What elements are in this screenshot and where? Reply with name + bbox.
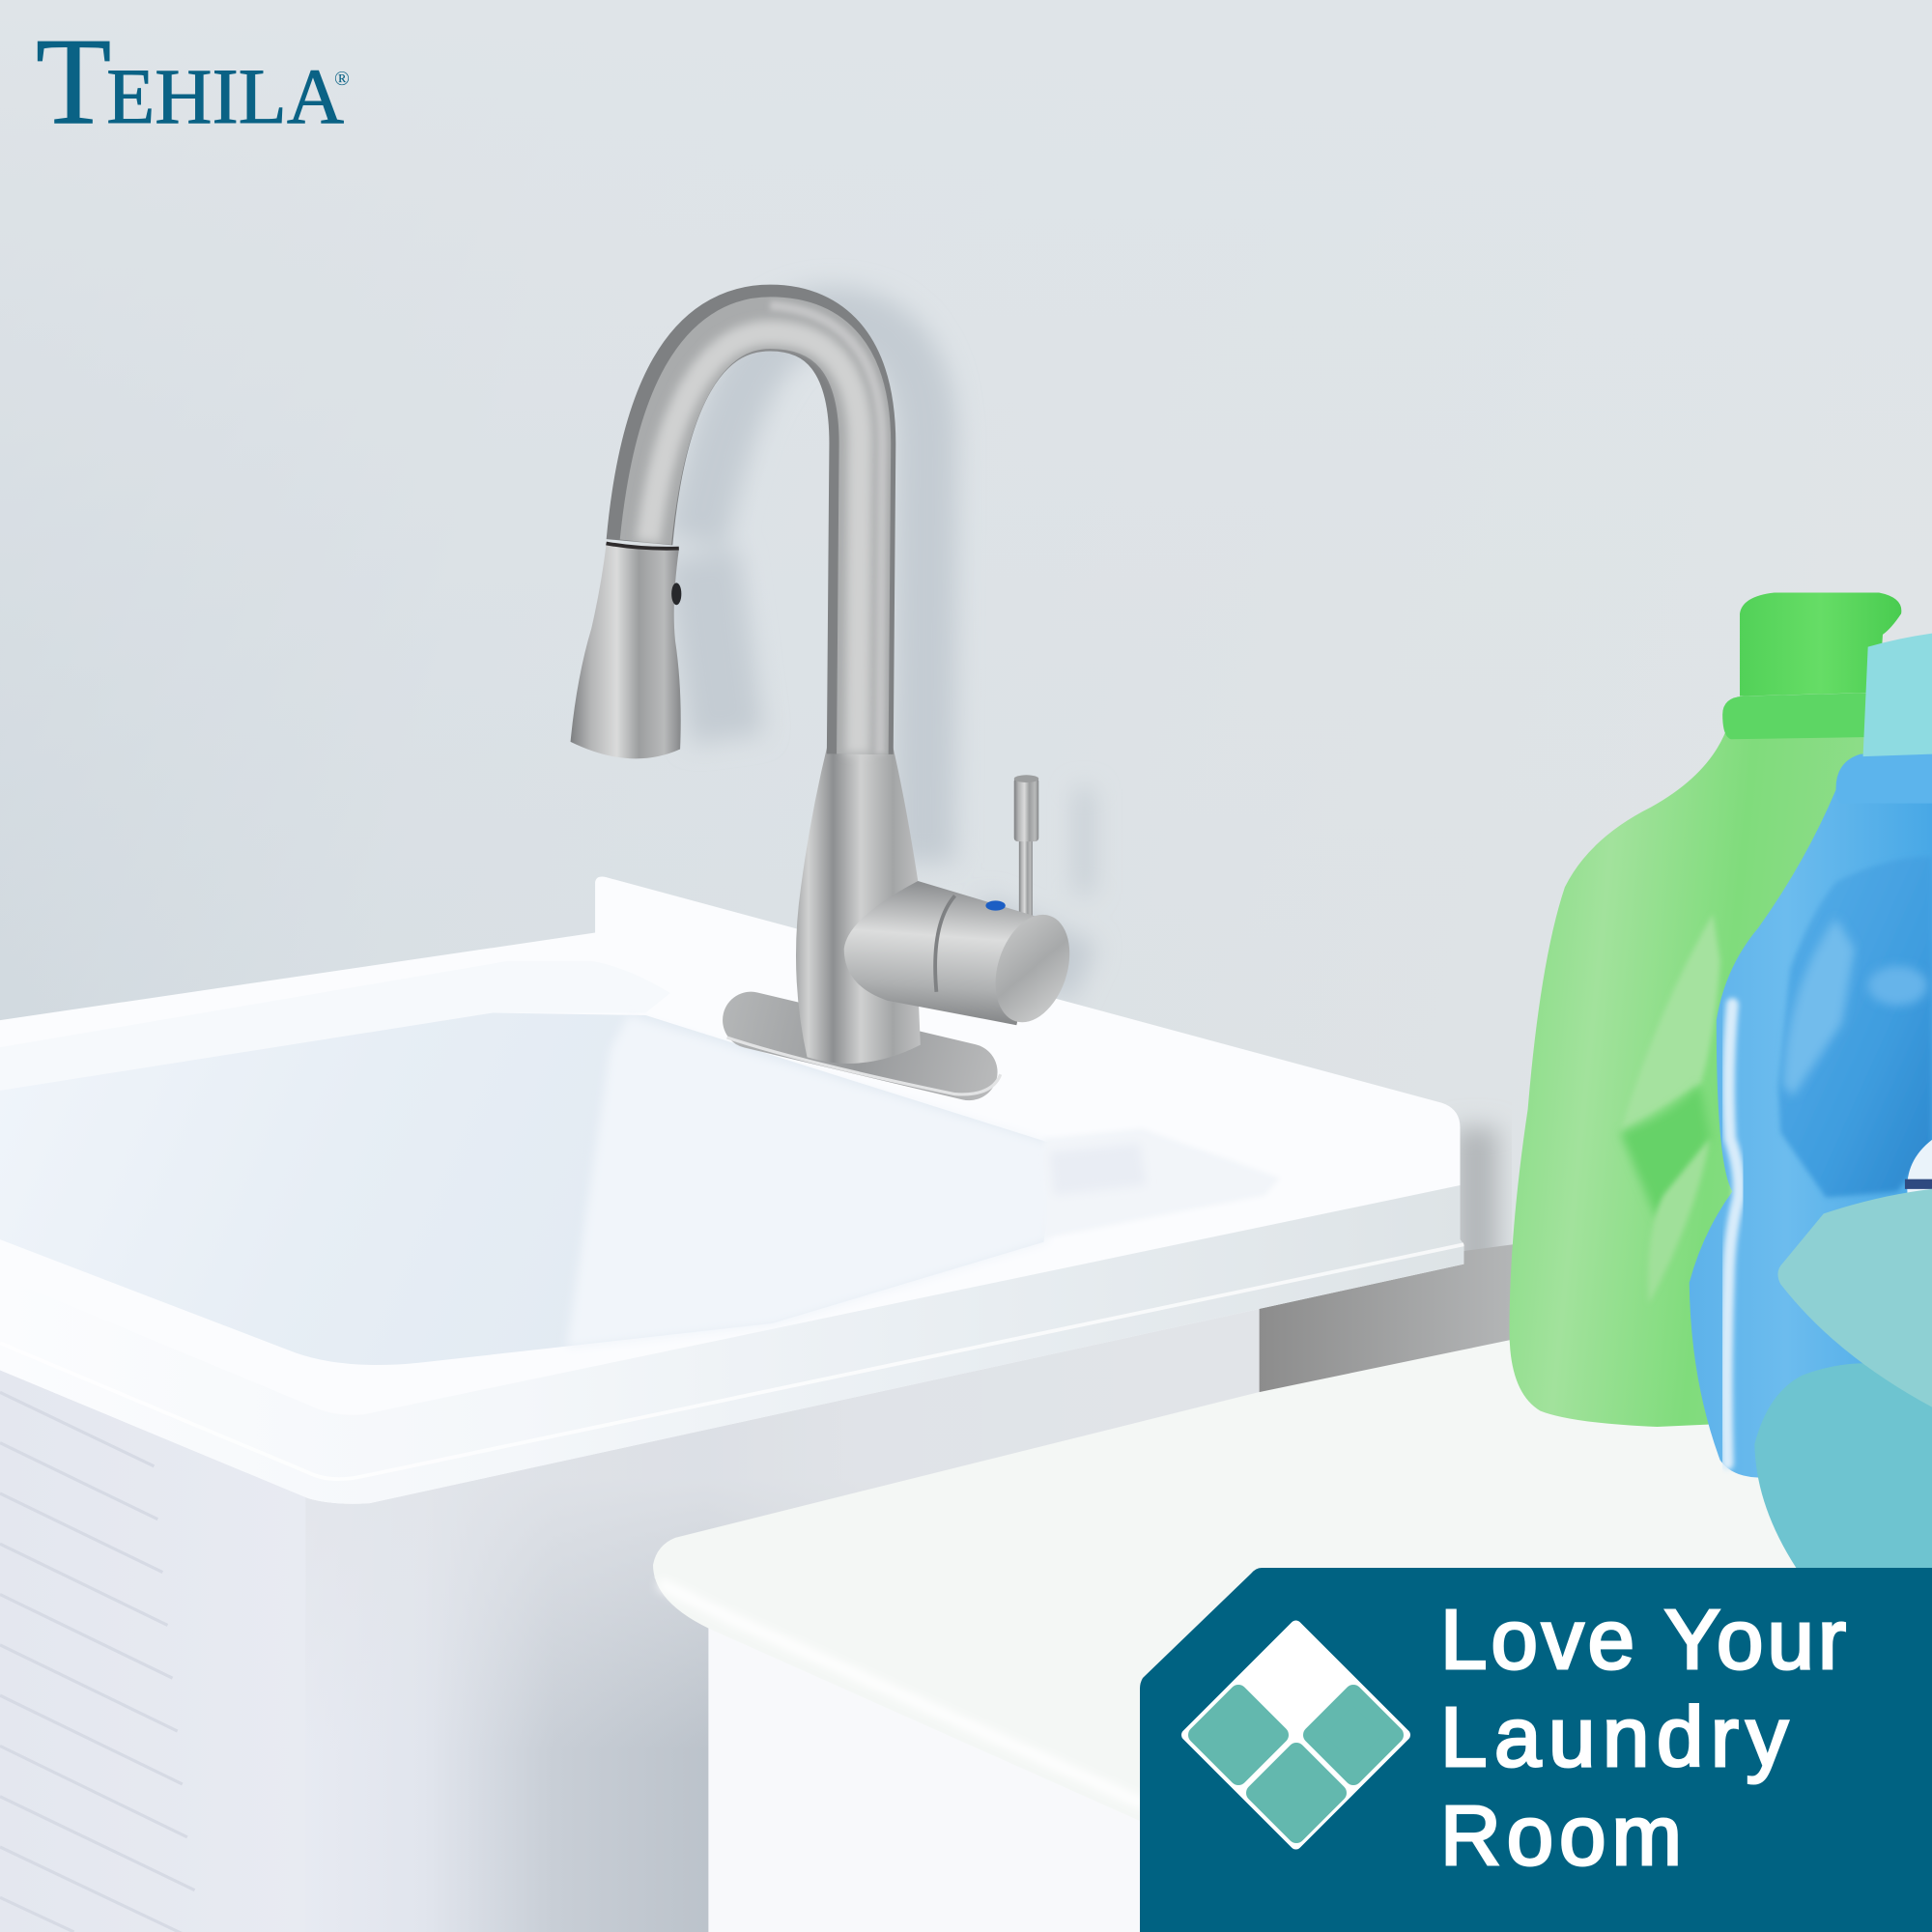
blue bottle label — [1907, 1140, 1932, 1193]
basin right wall — [567, 1015, 1060, 1348]
blue bottle handle glow right — [1868, 966, 1927, 1006]
blue bottle collar — [1836, 752, 1932, 804]
label navy strip — [1905, 1179, 1932, 1189]
cabinet top lightening — [469, 1309, 1260, 1683]
white diamond outline — [1187, 1627, 1405, 1843]
cabinet side with louvers — [0, 1355, 310, 1932]
wall shadow beside sink — [1460, 1117, 1509, 1251]
sink tub — [0, 877, 1463, 1504]
lower towel — [1754, 1363, 1932, 1589]
blue bottle body — [1690, 790, 1932, 1491]
counter nose highlight — [659, 1583, 1146, 1805]
upper towel — [1777, 1189, 1932, 1407]
green detergent bottle — [1509, 593, 1901, 1427]
green bottle collar — [1722, 693, 1886, 739]
green bottle body — [1509, 733, 1873, 1427]
gray shadow under sink — [1260, 1244, 1513, 1393]
badge headline — [1440, 1593, 1846, 1883]
rim crease highlight — [514, 1242, 1464, 1445]
spray head — [571, 545, 681, 758]
spray head seam — [607, 543, 679, 549]
green bottle cap — [1740, 593, 1901, 696]
badge headline: Love Your — [1440, 1593, 1846, 1687]
blue bottle handle — [1778, 856, 1932, 1198]
rim and backsplash — [0, 877, 1464, 1415]
lever ring — [935, 895, 955, 992]
blue bottle cap — [1863, 634, 1932, 756]
badge panel — [1140, 1568, 1932, 1932]
soap dish inner shade — [1050, 1144, 1146, 1195]
laundry sink cabinet — [0, 1300, 1260, 1932]
counter front face — [708, 1624, 1146, 1932]
rim front face — [553, 1185, 1463, 1463]
green bottle grip shadow — [1620, 1084, 1710, 1220]
bottom tile — [1255, 1751, 1338, 1834]
gooseneck spout — [639, 305, 882, 754]
counter top — [653, 1244, 1932, 1932]
badge headline: Laundry — [1440, 1690, 1789, 1784]
basin interior — [0, 1012, 1060, 1365]
logo: Tehila: TEHILA — [36, 13, 344, 150]
lever cylinder — [844, 881, 1041, 1025]
faucet — [571, 305, 1083, 1106]
basin lip — [0, 961, 670, 1091]
blue softener bottle — [1690, 634, 1932, 1491]
green bottle grip recess — [1620, 914, 1720, 1132]
counter surface — [653, 1244, 1932, 1932]
deck plate — [717, 986, 1004, 1106]
folded towels — [1754, 1189, 1932, 1589]
lever handle stem — [1014, 775, 1038, 922]
faucet body — [796, 743, 921, 1064]
faucet shadow on wall — [696, 318, 1084, 974]
blue bottle handle glow — [1783, 918, 1855, 1096]
lever end cap — [982, 905, 1083, 1032]
blue cold indicator — [985, 900, 1006, 911]
left tile — [1197, 1693, 1280, 1776]
logo: Tehila: ® — [334, 67, 350, 90]
right tile — [1312, 1693, 1395, 1776]
blue bottle highlight stripe — [1726, 1005, 1739, 1463]
badge headline: Room — [1440, 1789, 1682, 1883]
badge diamond icon — [1187, 1627, 1405, 1843]
cabinet front — [305, 1300, 1260, 1932]
soap dish recess — [1051, 1132, 1273, 1233]
spray button — [671, 582, 681, 605]
green bottle lower recess — [1648, 1139, 1710, 1303]
